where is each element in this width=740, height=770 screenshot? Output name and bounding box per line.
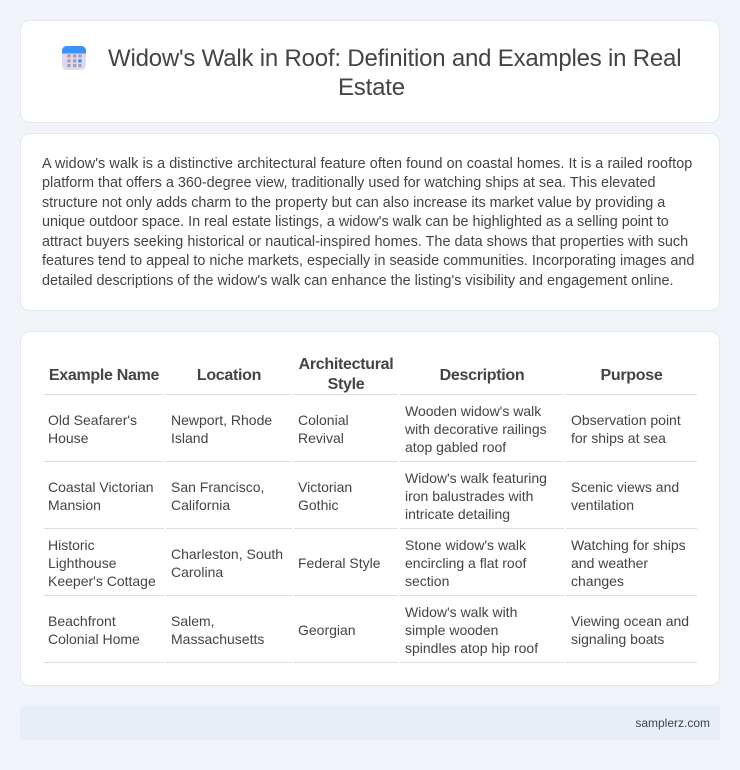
table header: Example Name	[49, 367, 159, 384]
table row 1: Revival	[298, 430, 344, 446]
footer bar	[20, 706, 720, 740]
table header: Architectural	[299, 356, 393, 373]
table header: Purpose	[601, 367, 662, 384]
table row 1: Newport, Rhode	[171, 412, 272, 428]
intro text: attract buyers seeking historical or nautical-inspired homes. The data shows that properties with such	[42, 234, 688, 250]
table row 2: intricate detailing	[405, 506, 510, 522]
table row 2: Gothic	[298, 497, 338, 513]
table header: Location	[197, 367, 261, 384]
table row 2	[48, 470, 679, 522]
intro text: A widow's walk is a distinctive architectural feature often found on coastal homes. It is a railed rooftop	[42, 156, 692, 172]
intro text: detailed descriptions of the widow's walk can enhance the listing's visibility and engagement online.	[42, 272, 674, 288]
table row 2: San Francisco,	[171, 479, 264, 495]
table row 2: iron balustrades with	[405, 488, 533, 504]
table panel	[20, 331, 720, 686]
table header	[49, 356, 662, 392]
table row 2: Widow's walk featuring	[405, 470, 547, 486]
table row 3: Watching for ships	[571, 537, 686, 553]
table row 1	[48, 403, 681, 455]
intro text	[42, 156, 694, 288]
table row 1: atop gabled roof	[405, 439, 506, 455]
table row 3: section	[405, 573, 449, 589]
table row 1: Colonial	[298, 412, 349, 428]
table row 3: Federal Style	[298, 555, 380, 571]
table row 2: Mansion	[48, 497, 101, 513]
table row 3: Charleston, South	[171, 546, 283, 562]
title: Widow's Walk in Roof: Definition and Examples in Real	[108, 45, 681, 72]
table row 4: Colonial Home	[48, 631, 140, 647]
table row 1: House	[48, 430, 88, 446]
table row 3: changes	[571, 573, 624, 589]
table row 4	[48, 604, 689, 656]
intro text: structure not only adds charm to the property but can also increase its market value by providing a	[42, 194, 665, 210]
table row 4: simple wooden	[405, 622, 498, 638]
table row 1: Island	[171, 430, 208, 446]
table row 4: spindles atop hip roof	[405, 640, 538, 656]
table row 4: Salem,	[171, 613, 215, 629]
intro text: features tend to appeal to niche markets, especially in seaside communities. Incorporating images and	[42, 253, 694, 269]
table row 3: Lighthouse	[48, 555, 117, 571]
footer text: samplerz.com	[635, 716, 710, 730]
table row 3: encircling a flat roof	[405, 555, 526, 571]
header panel	[20, 20, 720, 123]
table row 4: signaling boats	[571, 631, 664, 647]
table header: Style	[328, 376, 364, 392]
title: Estate	[338, 74, 405, 101]
table row 4: Widow's walk with	[405, 604, 517, 620]
intro text: platform that offers a 360-degree view, traditionally used for watching ships at sea. This elevated	[42, 175, 656, 191]
table row 2: ventilation	[571, 497, 634, 513]
intro text: unique outdoor space. In real estate listings, a widow's walk can be highlighted as a selling point to	[42, 214, 669, 230]
table row 1: Wooden widow's walk	[405, 403, 541, 419]
table row 2: Victorian	[298, 479, 352, 495]
table row 1: Observation point	[571, 412, 681, 428]
table row 2: California	[171, 497, 230, 513]
table row 4: Massachusetts	[171, 631, 264, 647]
intro panel	[20, 133, 720, 311]
table row 3	[48, 537, 686, 589]
table row 1: Old Seafarer's	[48, 412, 137, 428]
table row 2: Coastal Victorian	[48, 479, 154, 495]
table row 2: Scenic views and	[571, 479, 679, 495]
table row 1: with decorative railings	[405, 421, 547, 437]
table row 1: for ships at sea	[571, 430, 666, 446]
table: examples	[44, 356, 697, 663]
icon: calendar	[62, 46, 86, 70]
table row 4: Georgian	[298, 622, 356, 638]
table row 3: and weather	[571, 555, 648, 571]
table row 3: Carolina	[171, 564, 223, 580]
table row 3: Historic	[48, 537, 95, 553]
table row 3: Keeper's Cottage	[48, 573, 156, 589]
table row 4: Beachfront	[48, 613, 116, 629]
table header: Description	[440, 367, 524, 384]
table row 4: Viewing ocean and	[571, 613, 689, 629]
table row 3: Stone widow's walk	[405, 537, 526, 553]
title	[108, 45, 681, 101]
